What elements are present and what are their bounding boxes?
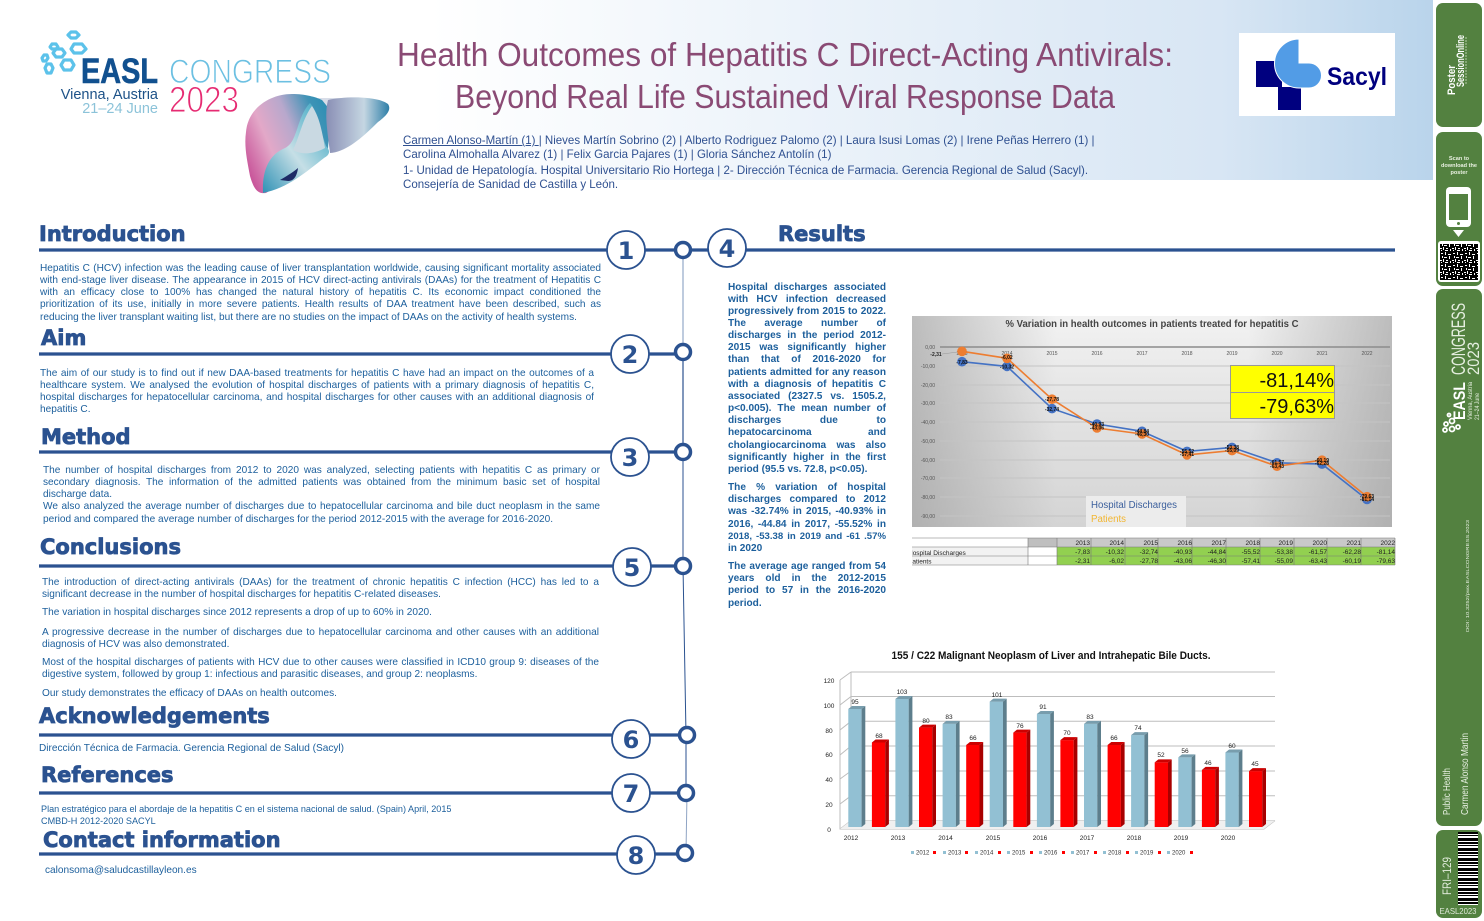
logo: EASL Congress 2023: 2023: [169, 79, 239, 120]
data labels: -53,38: [1225, 445, 1239, 451]
data labels: -32,74: [1045, 407, 1059, 413]
bar chart legend: 2016: [1044, 850, 1058, 856]
data table: [900, 538, 1395, 566]
text: conclusions: Most of the hospital discharges of patients with HCV due to other causes were classified in ICD10 group 9: diseases of the: [42, 657, 599, 668]
bar value labels: 103: [897, 689, 908, 696]
text: conclusions: diagnosis of HCV was also demonstrated.: [42, 639, 229, 650]
numbered circles: [607, 229, 746, 874]
data labels: -6,02: [1001, 355, 1013, 361]
sidebar panel: scan to download: Scan to: [1449, 156, 1470, 162]
bar chart legend: 2015: [1012, 850, 1026, 856]
data table: -63,43: [1309, 558, 1327, 565]
text: references: CMBD-H 2012-2020 SACYL: [41, 816, 156, 826]
authors and affiliations: 1- Unidad de Hepatología. Hospital Universitario Rio Hortega | 2- Dirección Técnica de Farmacia. Gerencia Regional de Salud (Sacyl).: [403, 165, 1088, 177]
data table: -6,02: [1109, 558, 1124, 565]
bar chart: malignant neoplasm of liver: 0: [827, 827, 831, 834]
bar chart legend: 2020: [1172, 850, 1186, 856]
bar chart: malignant neoplasm of liver: 2015: [986, 835, 1001, 842]
text: aim: hepatitis C.: [40, 404, 90, 415]
sidebar panel: congress and topic: Public Health: [1441, 768, 1453, 815]
data labels: -79,63: [1360, 494, 1374, 500]
legend: Patients: [1091, 514, 1126, 525]
header band: [0, 0, 1433, 180]
text: results: period (95.5 vs. 72.8, p<0.05).: [728, 464, 867, 475]
bar value labels: 91: [1039, 704, 1047, 711]
section rules and timeline: [39, 250, 1395, 854]
data table: 2015: [1144, 540, 1158, 547]
data labels: -81,14: [1360, 497, 1374, 503]
data table: -27,78: [1140, 558, 1158, 565]
bar chart legend: 2013: [948, 850, 962, 856]
data table: -62,28: [1343, 549, 1361, 556]
logo: Sacyl: [1239, 33, 1395, 116]
heading: Introduction: Introduction: [39, 222, 186, 246]
bar chart: malignant neoplasm of liver: 100: [824, 703, 835, 710]
bar chart: malignant neoplasm of liver: 120: [824, 678, 835, 685]
text: references: [41, 804, 451, 826]
line chart: % variation in health outcomes: -80,00: [921, 495, 935, 501]
barcode: [1458, 832, 1478, 905]
bar value labels: 46: [1204, 760, 1212, 767]
text: conclusions: significant decrease in the number of hospital discharges for hepatitis C-related diseases.: [42, 589, 441, 600]
text: results: The % variation of hospital: [728, 482, 886, 493]
line chart: % variation in health outcomes: 2014: [1001, 351, 1013, 357]
text: results: The average age ranged from 54: [728, 561, 886, 572]
text: results: years old in the 2012-2015: [728, 573, 886, 584]
logo: Sacyl: Sacyl: [1327, 63, 1387, 91]
bar chart: malignant neoplasm of liver: 2013: [891, 835, 906, 842]
authors and affiliations: [403, 135, 1094, 191]
data labels: [956, 355, 1374, 503]
data table: -60,19: [1343, 558, 1361, 565]
series: patients: [957, 346, 1372, 502]
text: results: Hospital discharges associated: [728, 282, 886, 292]
line chart: % variation in health outcomes: -2,31: [930, 352, 942, 358]
bar value labels: 56: [1181, 748, 1189, 755]
text: method: discharge data.: [43, 489, 112, 500]
text: introduction: with end-stage liver disease. The appearance in 2015 of HCV direct-acting antivirals (DAAs) for the treatment of Hepatitis C: [40, 275, 601, 286]
data table: 2020: [1313, 540, 1327, 547]
graphics layer: 8: [628, 842, 644, 870]
data table: -55,52: [1242, 549, 1260, 556]
text: results: discharges in the period 2012-: [728, 330, 886, 341]
heading: Acknowledgements: Acknowledgements: [39, 704, 270, 728]
heading: Conclusions: Conclusions: [40, 535, 181, 559]
text: results: with HCV infection decreased: [728, 294, 886, 305]
text: conclusions: A progressive decrease in the number of discharges due to hepatocellular carcinoma and other causes with an additional: [42, 627, 599, 638]
text: contact: calonsoma@saludcastillayleon.es: [45, 865, 197, 876]
text: results: discharges compared to 2012: [728, 494, 886, 505]
logo: EASL Congress 2023: [42, 32, 331, 120]
heading: References: References: [41, 763, 174, 787]
bar chart: malignant neoplasm of liver: 2014: [938, 835, 953, 842]
sidebar panel: congress and topic: Carmen Alonso Martin: [1459, 733, 1471, 815]
graphics layer: 6: [623, 726, 639, 754]
bar chart: malignant neoplasm of liver: 2016: [1033, 835, 1048, 842]
text: method: secondary diagnosis. The information of the admitted patients was obtained from the minimum basic set of hospital: [43, 477, 600, 488]
data labels: -10,32: [1000, 364, 1014, 370]
icon: hexagon cluster: [42, 32, 86, 73]
sidebar panel: scan to download: [1436, 132, 1482, 286]
line chart: % variation in health outcomes: -20,00: [921, 383, 935, 389]
graphics layer: 2: [622, 341, 638, 369]
text: results: than that of 2016-2020 for: [728, 354, 886, 365]
icon: liver: [245, 94, 389, 193]
data table: 2022: [1381, 540, 1395, 547]
icon: small EASL hexagons: [1443, 414, 1460, 432]
text: method: The number of hospital discharges from 2012 to 2020 was analyzed, selecting patients with hepatitis C as primary or: [43, 465, 600, 476]
text: results: cholangiocarcinoma was also: [728, 440, 886, 451]
data table: -44,84: [1208, 549, 1226, 556]
text: results: 2015 was significantly higher: [728, 342, 886, 353]
authors and affiliations: Consejería de Sanidad de Castilla y León.: [403, 179, 618, 191]
line chart: % variation in health outcomes: 2021: [1316, 351, 1328, 357]
title: Beyond Real Life Sustained Viral Response Data: [455, 78, 1116, 115]
data labels: -27,78: [1045, 397, 1059, 403]
bar chart legend: 2012: [916, 850, 930, 856]
data table: 2017: [1212, 540, 1226, 547]
data table: 2014: [1110, 540, 1124, 547]
bar value labels: 74: [1134, 725, 1142, 732]
data table: -40,93: [1174, 549, 1192, 556]
line chart: % variation in health outcomes: 2015: [1046, 351, 1058, 357]
data labels: -61,57: [1270, 460, 1284, 466]
line chart: % variation in health outcomes: 2019: [1226, 351, 1238, 357]
text: aim: [40, 368, 594, 415]
text: results: hepatocarcinoma and: [728, 427, 886, 438]
text: references: Plan estratégico para el abordaje de la hepatitis C en el sistema nacional de salud. (Spain) April, 2015: [41, 804, 451, 814]
logo: EASL Congress 2023: Vienna, Austria: [61, 87, 159, 103]
sidebar panel: congress and topic: Vienna, Austria: [1468, 381, 1474, 420]
text: conclusions: digestive system, followed by group 1: infectious and parasitic diseases, and group 2: neoplasms.: [42, 669, 477, 680]
series: hospital discharges: [957, 357, 1372, 504]
data table: 2021: [1347, 540, 1361, 547]
data table: Hospital Discharges: [908, 550, 967, 557]
bars: [848, 696, 1266, 827]
data labels: -60,19: [1315, 458, 1329, 464]
bar chart legend: [911, 850, 1193, 856]
text: results: was -32.74% in 2015, -40.93% in: [728, 506, 886, 517]
sidebar panel: Poster Session Online: SessionOnline: [1455, 35, 1467, 87]
bar value labels: 83: [945, 714, 953, 721]
data table: 2019: [1279, 540, 1293, 547]
text: results: The average number of: [728, 318, 886, 329]
text: results: in 2020: [728, 543, 762, 554]
data labels: -44,84: [1135, 429, 1149, 435]
text: results: p<0.005). The mean number of: [728, 403, 886, 414]
sidebar panel: Poster Session Online: [1436, 3, 1482, 127]
authors and affiliations: Carolina Almohalla Alvarez (1) | Felix Garcia Pajares (1) | Gloria Sánchez Antolín (1): [403, 149, 831, 161]
text: results: period.: [728, 598, 762, 609]
text: conclusions: [42, 577, 599, 699]
line chart: % variation in health outcomes: % Variation in health outcomes in patients treated for hepatitis C: [1006, 319, 1298, 330]
data table: -7,83: [1075, 549, 1090, 556]
data table: -46,30: [1208, 558, 1226, 565]
line chart: % variation in health outcomes: -40,00: [921, 420, 935, 426]
title: Health Outcomes of Hepatitis C Direct-Acting Antivirals:: [397, 36, 1173, 73]
graphics layer: 7: [623, 780, 639, 808]
text: method: period and compared the average number of discharges for the period 2012-2015 with the average for 2016-2020.: [43, 514, 553, 525]
line chart: % variation in health outcomes: 2013: [956, 351, 968, 357]
sidebar panel: scan to download: download the: [1441, 163, 1477, 169]
text: conclusions: The variation in hospital discharges since 2012 represents a drop of up to 60% in 2020.: [42, 607, 432, 618]
text: method: We also analyzed the average number of discharges due to hepatocellular carcinoma and bile duct neoplasm in the same: [43, 501, 600, 512]
bar value labels: 52: [1157, 752, 1165, 759]
sidebar panel: scan to download: poster: [1450, 170, 1468, 176]
bar value labels: 68: [875, 733, 883, 740]
bar value labels: 76: [1016, 723, 1024, 730]
sidebar panel: congress and topic: EASL: [1450, 382, 1469, 420]
text: aim: hospital discharges for hepatocellular carcinoma, and hospital discharges for other causes with an additional diagnosis of: [40, 392, 594, 403]
text: results: 2018, -53.38 in 2019 and -61 .57%: [728, 531, 886, 542]
authors and affiliations: Carmen Alonso-Martín (1) | Nieves Martín Sobrino (2) | Alberto Rodriguez Palomo (2) | Laura Isusi Lomas (2) | Irene Peñas Herrero (1) |: [403, 135, 1094, 147]
text: results: with a diagnosis of hepatitis C: [728, 379, 886, 390]
bar chart: malignant neoplasm of liver: 80: [825, 728, 833, 735]
sidebar panel: poster id and barcode: EASL2023: [1440, 906, 1477, 916]
text: aim: healthcare system. We analysed the evolution of hospital discharges of patients with a primary diagnosis of hepatitis C,: [40, 380, 594, 391]
bar value labels: 80: [922, 718, 930, 725]
callout: yellow percentages: -79,63%: [1260, 396, 1334, 418]
bar chart legend: 2018: [1108, 850, 1122, 856]
QR code: [1438, 241, 1480, 282]
bar chart legend: 2017: [1076, 850, 1090, 856]
text: introduction: [40, 263, 601, 323]
bar value labels: 66: [1110, 735, 1118, 742]
heading: Results: Results: [778, 222, 866, 246]
bar chart: malignant neoplasm of liver: 40: [825, 777, 833, 784]
sidebar panel: Poster Session Online: Poster: [1446, 64, 1458, 95]
line chart: % variation in health outcomes: 2016: [1091, 351, 1103, 357]
text: results: progressively from 2015 to 2022.: [728, 306, 886, 317]
line chart: % variation in health outcomes: -10,00: [921, 364, 935, 370]
data table: -43,06: [1174, 558, 1192, 565]
line chart: % variation in health outcomes: 0,00: [925, 345, 935, 351]
line chart: % variation in health outcomes: 2020: [1271, 351, 1283, 357]
data table: -55,09: [1275, 558, 1293, 565]
data table: -81,14: [1377, 549, 1395, 556]
data table: -79,63: [1377, 558, 1395, 565]
text: introduction: reducing the liver transplant waiting list, but there are no studies on the impact of DAAs on the activity of health systems.: [40, 312, 577, 323]
data labels: -55,52: [1180, 449, 1194, 455]
text: results: 2016, -44.84 in 2017, -55.52% in: [728, 519, 886, 530]
line chart: % variation in health outcomes: -30,00: [921, 401, 935, 407]
title: [397, 36, 1173, 115]
sidebar panel: congress and topic: DOI: 10.3252/pwx.EASLCONGRESS.2023: [1465, 519, 1470, 632]
bar chart: malignant neoplasm of liver: 2018: [1127, 835, 1142, 842]
sidebar panel: congress and topic: CONGRESS: [1449, 303, 1470, 375]
heading: Contact information: Contact information: [43, 828, 281, 852]
node markers: [676, 242, 694, 860]
text: results: [728, 282, 886, 609]
bar chart legend: 2019: [1140, 850, 1154, 856]
text: conclusions: The introduction of direct-acting antivirals (DAAs) for the treatment of chronic hepatitis C infection (HCC) has led to a: [42, 577, 599, 588]
data table: -2,31: [1075, 558, 1090, 565]
bar chart legend: 2014: [980, 850, 994, 856]
line chart: % variation in health outcomes: [912, 316, 1392, 527]
data labels: -57,41: [1180, 452, 1194, 458]
text: results: associated (2327.5 vs. 1505.2,: [728, 391, 886, 402]
data labels: -43,06: [1090, 426, 1104, 432]
bar value labels: 101: [992, 692, 1003, 699]
bar chart: malignant neoplasm of liver: 2020: [1221, 835, 1236, 842]
bar chart: malignant neoplasm of liver: 60: [825, 752, 833, 759]
data table: 2018: [1246, 540, 1260, 547]
callout: yellow percentages: [1230, 366, 1334, 418]
bar chart: malignant neoplasm of liver: 2012: [844, 835, 859, 842]
data table: -61,57: [1309, 549, 1327, 556]
bar value labels: 83: [1086, 714, 1094, 721]
line chart: % variation in health outcomes: -60,00: [921, 458, 935, 464]
legend: [1086, 496, 1186, 527]
data table: -10,32: [1106, 549, 1124, 556]
logo: EASL Congress 2023: EASL: [81, 52, 158, 91]
logo: EASL Congress 2023: CONGRESS: [169, 53, 331, 91]
text: introduction: Hepatitis C (HCV) infection was the leading cause of liver transplantation worldwide, causing significant mortality associated: [40, 263, 601, 274]
text: introduction: with an efficacy close to 100% has changed the natural history of hepatitis C. Its economic impact conditioned the: [40, 287, 601, 298]
line chart: % variation in health outcomes: -70,00: [921, 476, 935, 482]
bar chart: malignant neoplasm of liver: 2019: [1174, 835, 1189, 842]
sidebar panel: poster id and barcode: [1436, 830, 1482, 918]
data table: 2013: [1076, 540, 1090, 547]
data labels: -46,30: [1135, 432, 1149, 438]
data table: -53,38: [1275, 549, 1293, 556]
line chart: % variation in health outcomes: 2022: [1361, 351, 1373, 357]
bar chart: malignant neoplasm of liver: 20: [825, 802, 833, 809]
bar value labels: 45: [1251, 761, 1259, 768]
bar value labels: [851, 689, 1259, 768]
data labels: -62,28: [1315, 461, 1329, 467]
bar value labels: 66: [969, 735, 977, 742]
logo: EASL Congress 2023: 21–24 June: [82, 101, 158, 117]
line chart: % variation in health outcomes: 2017: [1136, 351, 1148, 357]
graphics layer: 1: [618, 237, 634, 265]
data table: -57,41: [1242, 558, 1260, 565]
sidebar panel: congress and topic: 21–24 June: [1475, 392, 1481, 420]
line chart: % variation in health outcomes: -50,00: [921, 439, 935, 445]
graphics layer: 4: [719, 235, 735, 263]
graphics layer: 3: [622, 444, 638, 472]
heading: Aim: Aim: [41, 326, 86, 350]
text: results: significantly higher in the first: [728, 452, 886, 463]
data labels: -7,83: [956, 360, 968, 366]
sidebar panel: congress and topic: 2023: [1464, 342, 1483, 375]
data table: Patients: [908, 558, 932, 566]
callout: yellow percentages: -81,14%: [1260, 370, 1334, 392]
bar chart: malignant neoplasm of liver: [824, 650, 1275, 856]
legend: Hospital Discharges: [1091, 500, 1177, 511]
text: aim: The aim of our study is to find out if new DAA-based treatments for hepatitis C have had an impact on the outcomes of a: [40, 368, 594, 379]
sidebar panel: congress and topic: [1436, 289, 1483, 826]
line chart: % variation in health outcomes: -90,00: [921, 514, 935, 520]
data labels: -55,09: [1225, 448, 1239, 454]
bar value labels: 70: [1063, 730, 1071, 737]
text: acknowledgements: Dirección Técnica de Farmacia. Gerencia Regional de Salud (Sacyl): [39, 743, 344, 754]
heading: Method: Method: [41, 425, 131, 449]
arrow: down to QR code: [1453, 230, 1464, 237]
text: introduction: prioritization of its use, initially in more severe patients. Health results of DAA treatment have been described, such as: [40, 299, 601, 310]
text: results: discharges due to: [728, 415, 886, 426]
data labels: -40,93: [1090, 422, 1104, 428]
text: results: period to 57 in the 2016-2020: [728, 585, 886, 596]
data table: -32,74: [1140, 549, 1158, 556]
bar value labels: 95: [851, 699, 859, 706]
bar chart: malignant neoplasm of liver: 155 / C22 Malignant Neoplasm of Liver and Intrahepatic Bile Ducts.: [892, 650, 1210, 662]
bar value labels: 60: [1228, 743, 1236, 750]
icon: phone: [1446, 187, 1471, 227]
text: results: patients admitted for any reason: [728, 367, 886, 378]
sidebar panel: poster id and barcode: FRI–129: [1440, 857, 1454, 895]
line chart: % variation in health outcomes: 2018: [1181, 351, 1193, 357]
bar chart: malignant neoplasm of liver: 2017: [1080, 835, 1095, 842]
text: conclusions: Our study demonstrates the efficacy of DAAs on health outcomes.: [42, 688, 337, 699]
text: method: [43, 465, 600, 525]
graphics layer: 5: [624, 554, 640, 582]
data labels: -63,43: [1270, 464, 1284, 470]
data table: 2016: [1178, 540, 1192, 547]
